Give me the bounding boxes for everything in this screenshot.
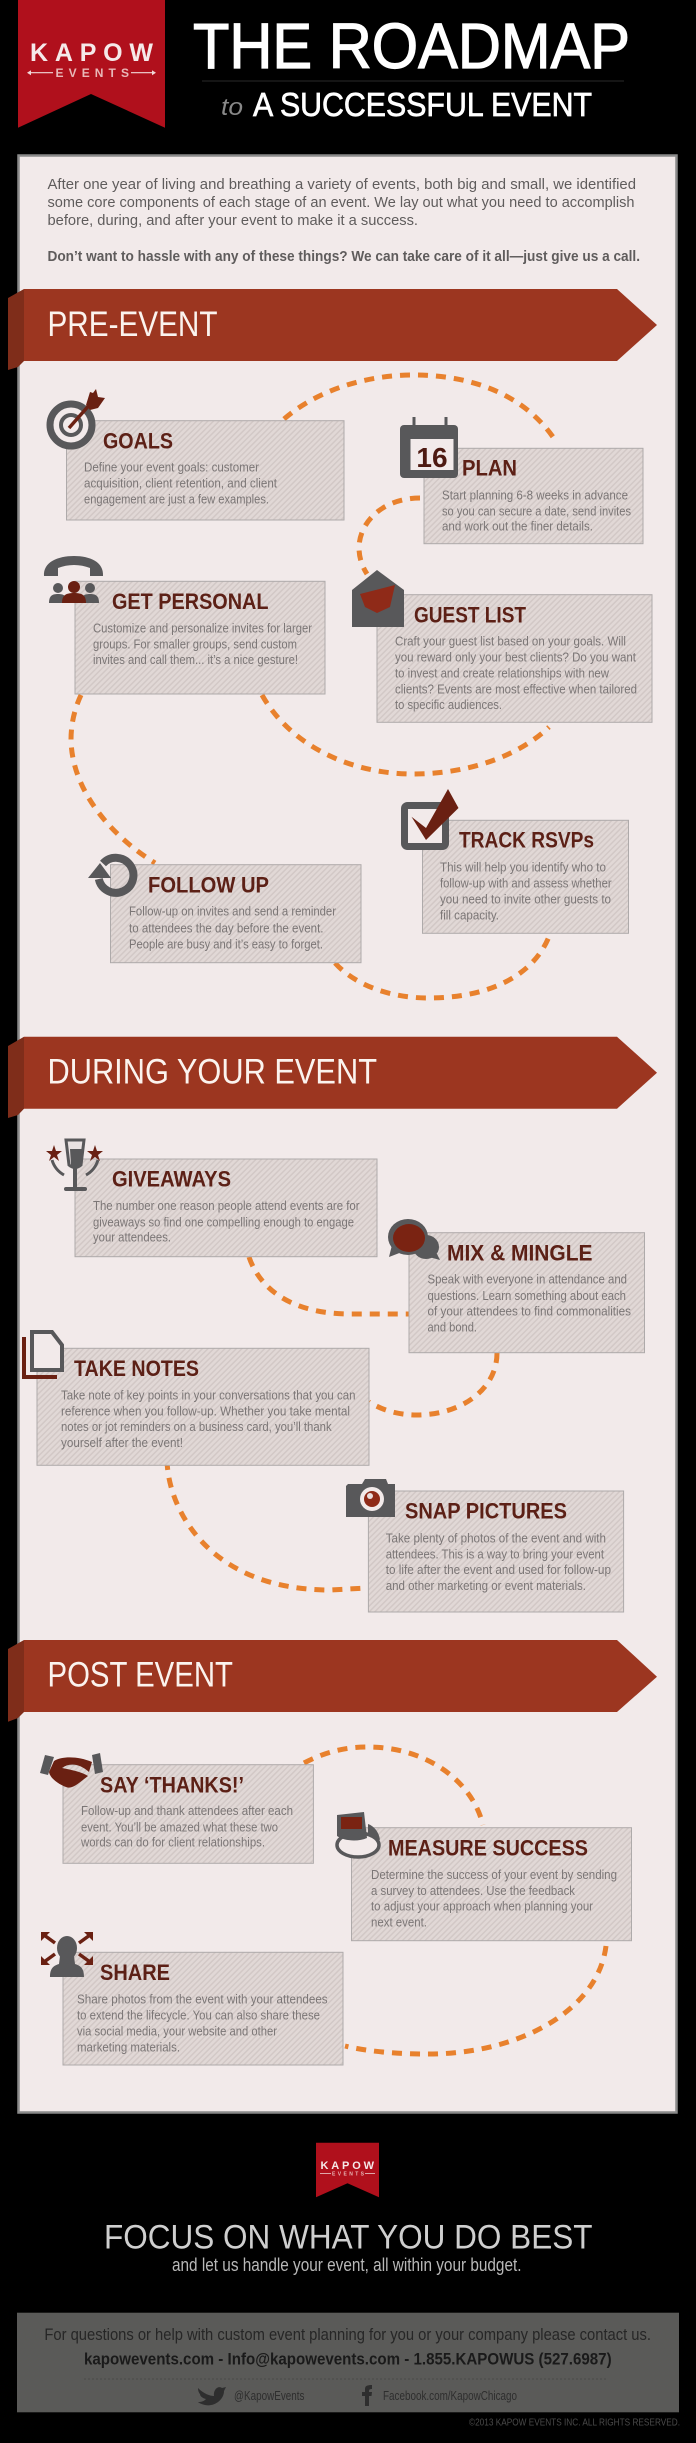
card: goals: engagement are just a few examples. [84, 491, 269, 506]
footer headline: FOCUS ON WHAT YOU DO BEST [104, 2218, 592, 2256]
banner: during your event: DURING YOUR EVENT [48, 1052, 377, 1091]
card: follow up: Follow-up on invites and send a reminder [129, 904, 337, 919]
footer headline [104, 2218, 592, 2275]
card: snap pictures: to life after the event and used for follow-up [386, 1562, 611, 1577]
banner: pre-event [8, 289, 657, 370]
card: snap pictures: attendees. This is a way to bring your event [386, 1547, 604, 1562]
card: guest list: clients? Events are most effective when tailored [395, 681, 637, 696]
card: snap pictures: and other marketing or event materials. [386, 1578, 586, 1593]
card: plan: so you can secure a date, send invites [442, 503, 631, 518]
card: say thanks: words can do for client relationships. [80, 1835, 265, 1850]
card: plan: Start planning 6-8 weeks in advance [442, 487, 628, 502]
card: measure success: next event. [371, 1915, 427, 1930]
intro text [48, 176, 640, 265]
banner: post event: POST EVENT [48, 1656, 233, 1695]
card: say thanks: SAY ‘THANKS!’ [100, 1772, 244, 1797]
card: take notes [24, 1332, 369, 1465]
card: follow up: to attendees the day before the event. [129, 920, 324, 935]
card: get personal: Customize and personalize invites for larger [93, 620, 313, 635]
main panel background [18, 156, 676, 2112]
card: guest list [352, 570, 652, 722]
card: track rsvps: fill capacity. [440, 908, 499, 923]
banner: pre-event: PRE-EVENT [48, 305, 218, 344]
route: get personal to guest list [262, 695, 549, 774]
card: guest list: you reward only your best clients? Do you want [395, 650, 636, 665]
card: guest list: GUEST LIST [414, 602, 526, 627]
card: follow up: FOLLOW UP [148, 873, 269, 898]
card: share [41, 1932, 343, 2065]
card: measure success: MEASURE SUCCESS [388, 1836, 588, 1861]
icon: pie chart [337, 1812, 380, 1857]
card: measure success: Determine the success of your event by sending [371, 1867, 617, 1882]
card: share: to extend the lifecycle. You can also share these [77, 2008, 320, 2023]
icon: chat bubbles [388, 1219, 440, 1260]
card: mix and mingle: MIX & MINGLE [447, 1241, 592, 1266]
footer headline: and let us handle your event, all within your budget. [172, 2255, 522, 2275]
card: take notes: reference when you follow-up. Whether you take mental [61, 1403, 350, 1418]
card: share: Share photos from the event with your attendees [77, 1991, 328, 2006]
card: goals [50, 389, 344, 520]
logo ribbon: EVENTS [56, 66, 129, 80]
icon: twitter bird [198, 2387, 226, 2405]
contact panel [17, 2313, 679, 2412]
intro text: some core components of each stage of an event. We lay out what you need to accomplish [48, 194, 634, 211]
card: plan [400, 417, 643, 544]
icon: calendar [400, 417, 458, 478]
card: plan: and work out the finer details. [442, 519, 593, 534]
intro text: before, during, and after your event to make it a success. [48, 212, 418, 229]
route: plan to guest list [359, 498, 420, 574]
icon: trophy and stars [46, 1140, 103, 1191]
card: goals: acquisition, client retention, and client [84, 476, 277, 491]
title: to [221, 94, 243, 121]
icon: refresh arrow [88, 858, 133, 893]
route: goals to plan [284, 375, 557, 443]
card: snap pictures: SNAP PICTURES [405, 1498, 567, 1523]
icon: target [50, 389, 105, 446]
card: track rsvps: follow-up with and assess whether [440, 876, 612, 891]
card: say thanks: Follow-up and thank attendees after each [81, 1803, 293, 1818]
card: mix and mingle [388, 1219, 644, 1353]
icon: person with arrows [41, 1932, 93, 1977]
card: goals: GOALS [103, 428, 173, 453]
card: track rsvps: This will help you identify who to [440, 859, 606, 874]
card: giveaways [46, 1140, 377, 1257]
card: plan: PLAN [462, 456, 517, 481]
route: take notes to snap pictures [167, 1460, 368, 1590]
card: giveaways: The number one reason people attend events are for [93, 1198, 360, 1213]
card: share: SHARE [100, 1960, 170, 1985]
card: take notes: TAKE NOTES [74, 1356, 199, 1381]
card: measure success: to adjust your approach when planning your [371, 1899, 594, 1914]
intro text: After one year of living and breathing a variety of events, both big and small, we identified [48, 176, 636, 193]
icon: camera [346, 1479, 395, 1517]
title: A SUCCESSFUL EVENT [253, 86, 592, 123]
card: snap pictures: Take plenty of photos of the event and with [386, 1530, 606, 1545]
card: guest list: to specific audiences. [395, 697, 502, 712]
logo ribbon: KAPOW [30, 39, 153, 67]
route: get personal to follow up [71, 695, 155, 863]
card: share: via social media, your website and other [77, 2023, 278, 2038]
card: measure success: a survey to attendees. Use the feedback [371, 1883, 575, 1898]
card: get personal: invites and call them... it’s a nice gesture! [93, 652, 298, 667]
icon: phone and people [44, 556, 103, 603]
card: say thanks: event. You’ll be amazed what these two [81, 1820, 278, 1835]
footer logo ribbon: KAPOW [320, 2160, 375, 2172]
card: follow up [88, 858, 361, 963]
card: get personal [44, 556, 325, 694]
banner: post event [8, 1640, 657, 1722]
contact panel: @KapowEvents [234, 2388, 305, 2403]
card: giveaways: giveaways so find one compelling enough to engage [93, 1214, 354, 1229]
intro text: Don’t want to hassle with any of these things? We can take care of it all—just give us a call. [48, 248, 640, 265]
card: mix and mingle: of your attendees to find commonalities [428, 1304, 631, 1319]
card: track rsvps: TRACK RSVPs [459, 828, 594, 853]
icon: document [24, 1332, 62, 1377]
card: get personal: GET PERSONAL [112, 589, 268, 614]
icon: facebook f [362, 2385, 372, 2406]
route: follow up to track rsvps [335, 934, 550, 998]
card: mix and mingle: questions. Learn something about each [428, 1288, 626, 1303]
banner: during your event [8, 1037, 657, 1118]
card: goals: Define your event goals: customer [84, 460, 260, 475]
route: say thanks to measure success [304, 1747, 483, 1825]
card: measure success [337, 1812, 632, 1941]
logo ribbon [18, 0, 165, 128]
card: get personal: groups. For smaller groups, send custom [93, 637, 297, 652]
card: track rsvps: you need to invite other guests to [440, 891, 611, 906]
icon: checkbox [404, 789, 458, 846]
card: giveaways: GIVEAWAYS [112, 1167, 231, 1192]
contact panel: kapowevents.com - Info@kapowevents.com - 1.855.KAPOWUS (527.6987) [84, 2349, 612, 2368]
card: mix and mingle: and bond. [428, 1320, 477, 1335]
route: giveaways to mix and mingle [249, 1257, 411, 1314]
card: share: marketing materials. [77, 2039, 180, 2054]
card: take notes: Take note of key points in your conversations that you can [61, 1387, 356, 1402]
card: take notes: notes or jot reminders on a business card, you’ll thank [61, 1419, 332, 1434]
card: mix and mingle: Speak with everyone in attendance and [428, 1272, 627, 1287]
card: say thanks [40, 1753, 313, 1863]
title [193, 10, 630, 123]
card: follow up: People are busy and it’s easy to forget. [129, 936, 323, 951]
card: giveaways: your attendees. [93, 1230, 171, 1245]
footer logo ribbon: EVENTS [332, 2172, 365, 2178]
card: guest list: to invest and create relationships with new [395, 665, 610, 680]
icon: handshake [40, 1753, 103, 1788]
icon: calendar: 16 [416, 442, 448, 473]
contact panel: Facebook.com/KapowChicago [383, 2388, 517, 2403]
card: take notes: yourself after the event! [61, 1435, 183, 1450]
route: measure success to share [345, 1946, 606, 2054]
route: mix and mingle to take notes [369, 1353, 497, 1415]
icon: envelope [352, 570, 404, 627]
card: track rsvps [404, 789, 628, 933]
card: guest list: Craft your guest list based on your goals. Will [395, 634, 626, 649]
footer logo ribbon [316, 2143, 379, 2197]
card: snap pictures [346, 1479, 624, 1612]
title: THE ROADMAP [193, 10, 630, 82]
